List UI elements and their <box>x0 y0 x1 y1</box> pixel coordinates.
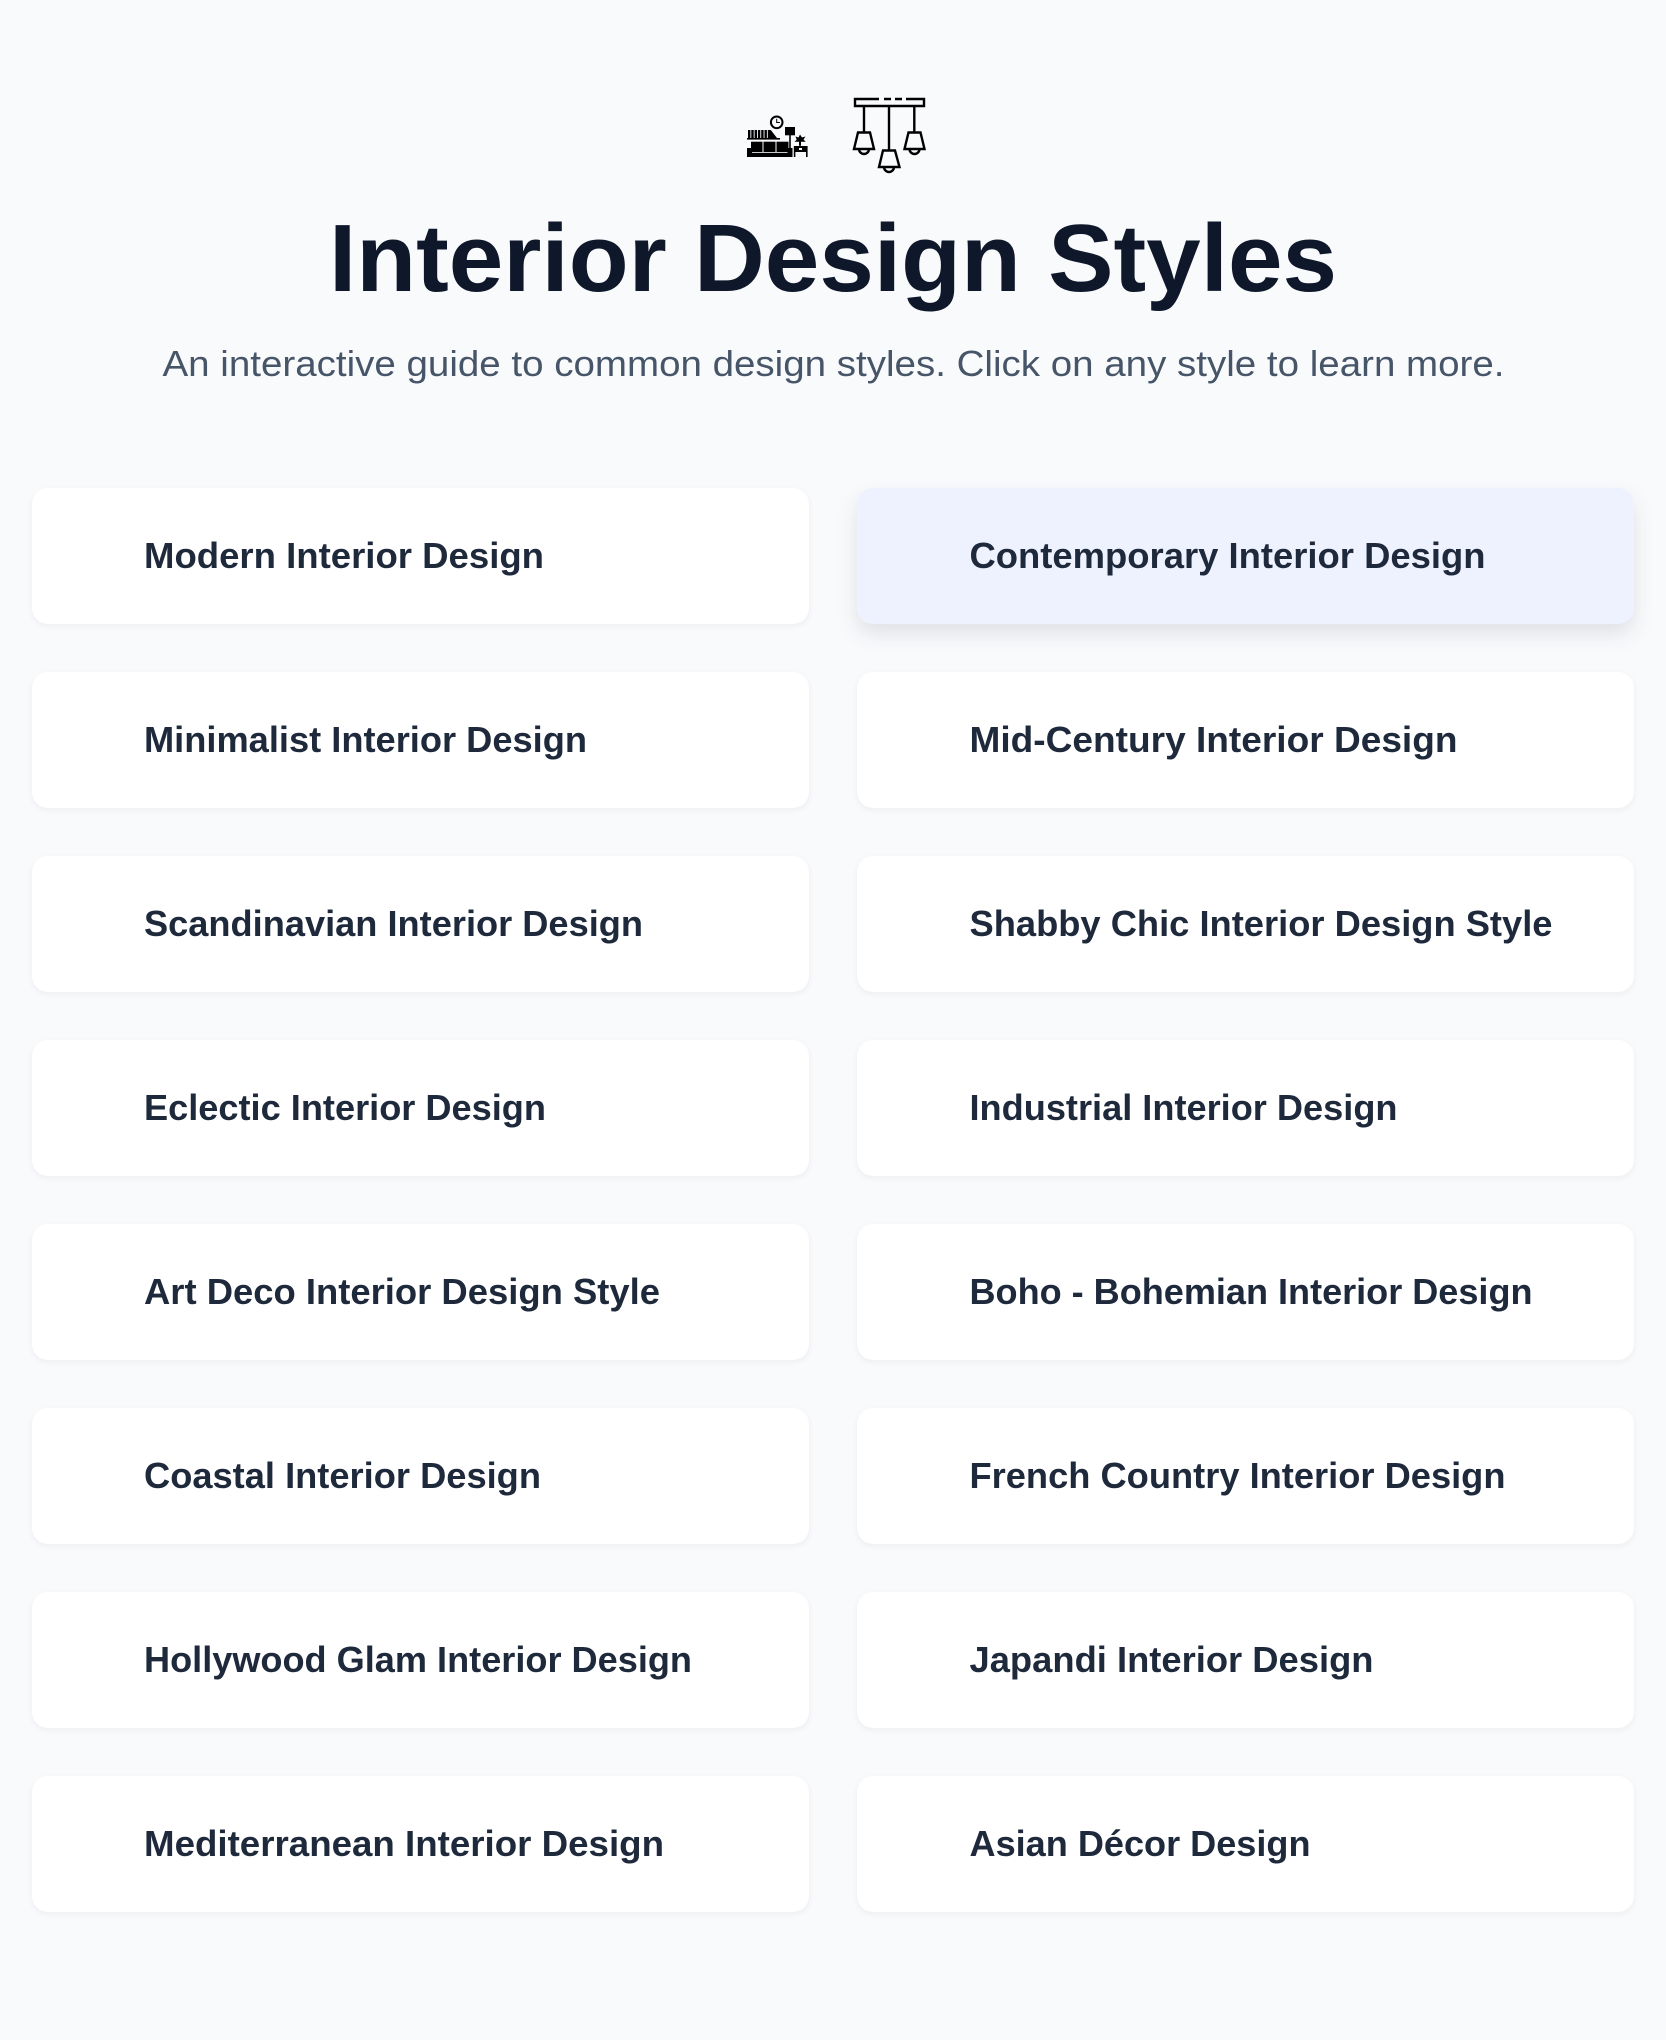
card: French Country Interior Design <box>857 1408 1634 1544</box>
card: Minimalist Interior Design: Minimalist Interior Design <box>144 719 587 760</box>
card: Scandinavian Interior Design: Scandinavian Interior Design <box>144 903 643 944</box>
card: Mediterranean Interior Design: Mediterranean Interior Design <box>144 1823 664 1864</box>
card: Mid-Century Interior Design: Mid-Century Interior Design <box>970 719 1458 760</box>
card: Shabby Chic Interior Design Style: Shabby Chic Interior Design Style <box>970 903 1552 944</box>
card: Mediterranean Interior Design <box>32 1776 809 1912</box>
card: Mid-Century Interior Design <box>857 672 1634 808</box>
card: Hollywood Glam Interior Design <box>32 1592 809 1728</box>
card: Asian Décor Design <box>857 1776 1634 1912</box>
card: Industrial Interior Design <box>857 1040 1634 1176</box>
card: Scandinavian Interior Design <box>32 856 809 992</box>
subtitle: An interactive guide to common design styles. Click on any style to learn more. <box>162 343 1504 384</box>
card: Eclectic Interior Design <box>32 1040 809 1176</box>
card: Industrial Interior Design: Industrial Interior Design <box>970 1087 1398 1128</box>
card: Minimalist Interior Design <box>32 672 809 808</box>
card: Contemporary Interior Design (highlighted): Contemporary Interior Design <box>970 535 1486 576</box>
card: Coastal Interior Design: Coastal Interior Design <box>144 1455 541 1496</box>
card: Japandi Interior Design <box>857 1592 1634 1728</box>
card: Shabby Chic Interior Design Style <box>857 856 1634 992</box>
icon: living room sofa <box>747 116 808 157</box>
card: French Country Interior Design: French Country Interior Design <box>970 1455 1506 1496</box>
icon: pendant lamps <box>854 99 924 172</box>
card: Modern Interior Design <box>32 488 809 624</box>
title: Interior Design Styles <box>329 205 1337 312</box>
card: Art Deco Interior Design Style <box>32 1224 809 1360</box>
card: Eclectic Interior Design: Eclectic Interior Design <box>144 1087 546 1128</box>
card: Boho - Bohemian Interior Design <box>857 1224 1634 1360</box>
card: Boho - Bohemian Interior Design: Boho - Bohemian Interior Design <box>970 1271 1532 1312</box>
card: Hollywood Glam Interior Design: Hollywood Glam Interior Design <box>144 1639 692 1680</box>
card: Modern Interior Design: Modern Interior Design <box>144 535 544 576</box>
card: Contemporary Interior Design (highlighted) <box>857 488 1634 624</box>
card: Asian Décor Design: Asian Décor Design <box>970 1823 1310 1864</box>
card: Art Deco Interior Design Style: Art Deco Interior Design Style <box>144 1271 660 1312</box>
card: Japandi Interior Design: Japandi Interior Design <box>970 1639 1374 1680</box>
card: Coastal Interior Design <box>32 1408 809 1544</box>
